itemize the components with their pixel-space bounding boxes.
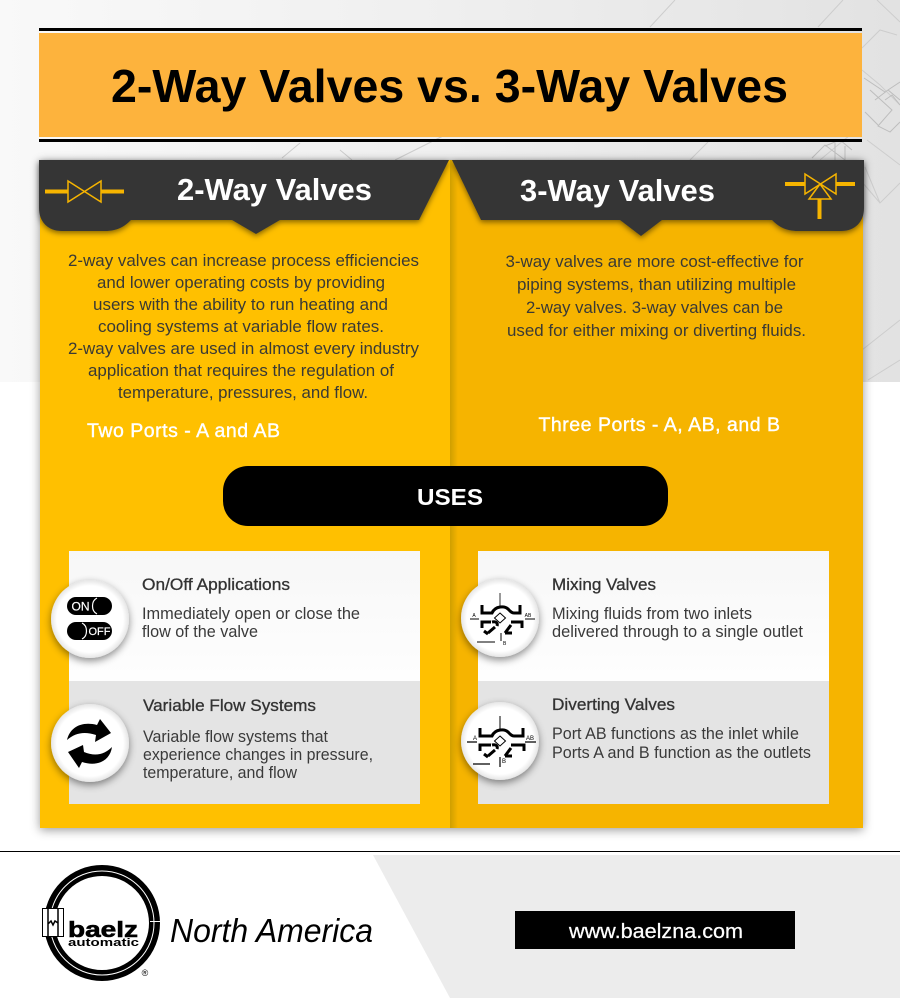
panel: 2-way valves <box>39 160 450 828</box>
icon: mixing valve diagram: B <box>503 641 507 647</box>
text: variable flow: Variable Flow Systems <box>143 697 316 715</box>
logo: baelz automatic: ® <box>142 968 149 978</box>
text: 2-way description: 2-way valves can increase process efficiencies <box>68 251 419 270</box>
heading: 2-way valves: 2-Way Valves <box>177 173 372 207</box>
logo: baelz automatic: baelz <box>68 917 138 942</box>
icon: circular arrows <box>51 704 129 782</box>
text: 2-way description: users with the ability to run heating and <box>93 295 388 314</box>
footer background <box>0 851 900 998</box>
text: variable flow: temperature, and flow <box>143 764 297 782</box>
icon: diverting valve diagram: AB <box>526 736 534 742</box>
text: 2-way description: application that requires the regulation of <box>88 361 394 380</box>
icon: diverting valve diagram: B <box>502 759 506 765</box>
title banner <box>39 28 862 142</box>
text: variable flow <box>143 697 373 782</box>
text: on/off: On/Off Applications <box>142 576 290 594</box>
text: 2-way description: cooling systems at variable flow rates. <box>98 317 384 336</box>
heading: 3-way valves: 3-Way Valves <box>520 174 715 208</box>
uses banner <box>223 466 668 526</box>
text: 3-way description: piping systems, than utilizing multiple <box>517 275 796 294</box>
text: diverting valves: Ports A and B function as the outlets <box>552 744 811 762</box>
text: 3-way description <box>506 252 806 340</box>
icon: diverting valve diagram: A <box>473 736 477 742</box>
panel: 3-way valves <box>450 160 864 828</box>
text: diverting valves: Diverting Valves <box>552 696 675 714</box>
text: three ports: Three Ports - A, AB, and B <box>538 414 780 436</box>
card: diverting valves <box>461 681 829 804</box>
text: 2-way description <box>68 251 419 402</box>
text: on/off: flow of the valve <box>142 623 258 641</box>
card: mixing valves <box>461 551 829 681</box>
icon: on/off toggles: OFF <box>88 626 111 638</box>
text: 3-way description: used for either mixing or diverting fluids. <box>507 321 806 340</box>
text: mixing valves: Mixing fluids from two inlets <box>552 605 752 623</box>
logo: baelz automatic <box>42 870 160 978</box>
text: mixing valves: Mixing Valves <box>552 576 656 594</box>
icon: diverting valve diagram <box>461 702 539 780</box>
text: diverting valves <box>552 696 811 762</box>
logo: baelz automatic: automatic <box>68 937 139 949</box>
text: 2-way description: temperature, pressures, and flow. <box>118 383 368 402</box>
header: 3-way valves <box>452 160 864 236</box>
icon: mixing valve diagram: AB <box>525 613 532 619</box>
text: on/off <box>142 576 360 641</box>
website button <box>515 911 795 949</box>
text: variable flow: experience changes in pressure, <box>143 746 373 764</box>
text: on/off: Immediately open or close the <box>142 605 360 623</box>
icon: mixing valve diagram <box>461 579 539 657</box>
text: 2-way description: and lower operating costs by providing <box>97 273 385 292</box>
header: 2-way valves <box>39 160 449 234</box>
icon: on/off toggles: ON <box>72 600 90 614</box>
background blueprint <box>0 0 900 382</box>
icon: 2-way valve symbol <box>45 181 124 202</box>
text: 3-way description: 3-way valves are more cost-effective for <box>506 252 804 271</box>
title: 2-Way Valves vs. 3-Way Valves <box>111 60 788 112</box>
text: mixing valves: delivered through to a single outlet <box>552 623 803 641</box>
uses banner: USES <box>417 484 483 510</box>
website button: www.baelzna.com <box>568 920 743 943</box>
icon: on/off toggles <box>51 580 129 658</box>
text: variable flow: Variable flow systems that <box>143 728 328 746</box>
card: on/off applications <box>51 551 420 681</box>
icon: 3-way valve symbol <box>785 174 855 219</box>
text: two ports: Two Ports - A and AB <box>87 420 280 442</box>
text: 2-way description: 2-way valves are used in almost every industry <box>68 339 419 358</box>
text: 3-way description: 2-way valves. 3-way valves can be <box>526 298 783 317</box>
text: North America: North America <box>170 912 373 949</box>
icon: mixing valve diagram: A <box>472 613 476 619</box>
panel: backing <box>40 160 863 828</box>
text: mixing valves <box>552 576 803 641</box>
card: variable flow systems <box>51 681 420 804</box>
text: diverting valves: Port AB functions as the inlet while <box>552 725 799 743</box>
